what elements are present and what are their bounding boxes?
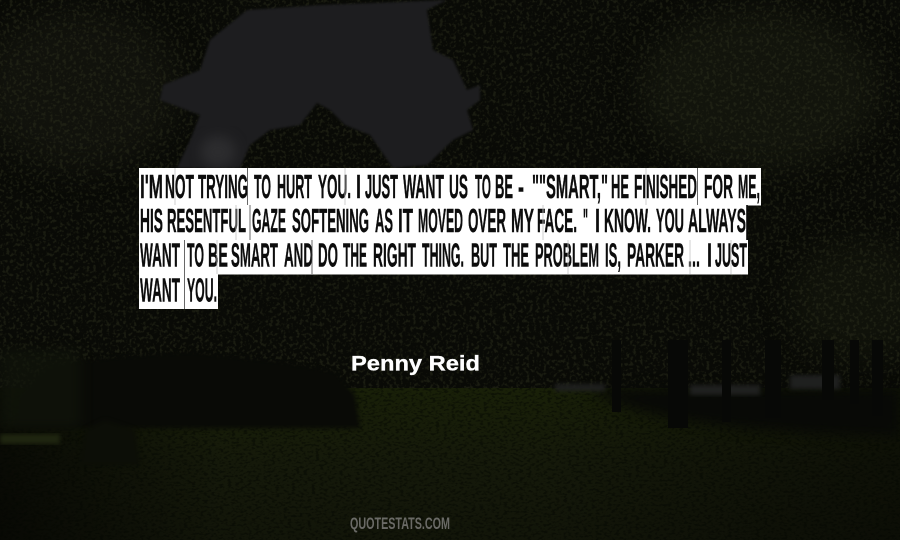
quote line 3: ...	[688, 237, 700, 274]
quote line 2: MOVED	[418, 202, 463, 239]
quote line 1: NOT	[165, 168, 194, 205]
quote line 2: FACE.	[537, 202, 577, 239]
lawn	[0, 388, 900, 540]
quote line 3: PARKER	[627, 237, 684, 274]
hedge	[0, 350, 360, 428]
quote line 3: PROBLEM	[535, 237, 599, 274]
quote line 1	[140, 168, 760, 205]
quote line 1: JUST	[365, 168, 398, 205]
tree trunks	[612, 340, 883, 428]
quote line 1: TO	[475, 168, 491, 205]
quote line 2: YOU	[656, 202, 684, 239]
quote line 3: AND	[284, 237, 313, 274]
tree canopy left	[0, 10, 180, 170]
watermark: site name: QUOTESTATS.COM	[350, 514, 450, 533]
quote line 1: FOR	[704, 168, 733, 205]
quote text: YOU.	[187, 272, 217, 309]
quote line 1: HURT	[277, 168, 312, 205]
quote line 2: I	[595, 202, 600, 239]
distant path patches	[555, 375, 840, 395]
author name: Penny Reid	[351, 352, 480, 376]
quote line 2: IT	[398, 202, 413, 239]
quote line 3: THE	[503, 237, 529, 274]
light lawn strip left	[0, 434, 60, 444]
quote line 1: YOU.	[318, 168, 351, 205]
quote line 2: "	[583, 202, 588, 239]
quote line 1: I	[356, 168, 361, 205]
quote line 4: WANT	[140, 272, 180, 309]
quote line 3: I	[707, 237, 712, 274]
quote line 3: RIGHT	[373, 237, 416, 274]
quote line 1: WANT	[403, 168, 444, 205]
quote line 3: THE	[343, 237, 367, 274]
quote line 1: FINISHED	[634, 168, 697, 205]
quote line 3: BE	[208, 237, 228, 274]
quote line 3: THING.	[422, 237, 464, 274]
quote line 3: BUT	[471, 237, 497, 274]
quote line 3: TO	[187, 237, 204, 274]
quote line 2: MY	[511, 202, 534, 239]
foliage texture	[0, 0, 900, 390]
quote line 2: KNOW.	[604, 202, 651, 239]
quote line 3: SMART	[231, 237, 278, 274]
quote line 2: GAZE	[252, 202, 286, 239]
quote line 1: BE	[495, 168, 513, 205]
quote line 2: HIS	[140, 202, 163, 239]
quote line 1: I'M	[140, 168, 163, 205]
quote line 3: DO	[318, 237, 338, 274]
quote line 1: HE	[611, 168, 629, 205]
quote highlight boxes	[139, 168, 761, 309]
quote line 2: SOFTENING	[292, 202, 369, 239]
quote line 3: IS,	[605, 237, 621, 274]
sky	[160, 0, 480, 168]
small tree by hedge	[80, 420, 140, 465]
quote text	[140, 168, 760, 309]
tree canopy right	[640, 10, 900, 360]
quote poster: ME,	[738, 168, 760, 205]
quote line 3	[140, 237, 747, 274]
quote line 1: ""SMART,"	[532, 168, 608, 205]
quote line 2: AS	[375, 202, 393, 239]
quote line 2	[140, 202, 746, 239]
shadow under trees at right	[590, 388, 900, 436]
quote line 1: US	[449, 168, 468, 205]
quote text: ALWAYS	[688, 202, 746, 239]
quote line 1: TO	[254, 168, 271, 205]
quote text: JUST	[715, 237, 747, 274]
quote line 1: -	[518, 168, 524, 205]
box seam lines	[175, 168, 747, 309]
quote line 1: TRYING	[198, 168, 248, 205]
quote line 2: OVER	[468, 202, 506, 239]
quote line 2: RESENTFUL	[167, 202, 246, 239]
quote line 3: WANT	[140, 237, 180, 274]
